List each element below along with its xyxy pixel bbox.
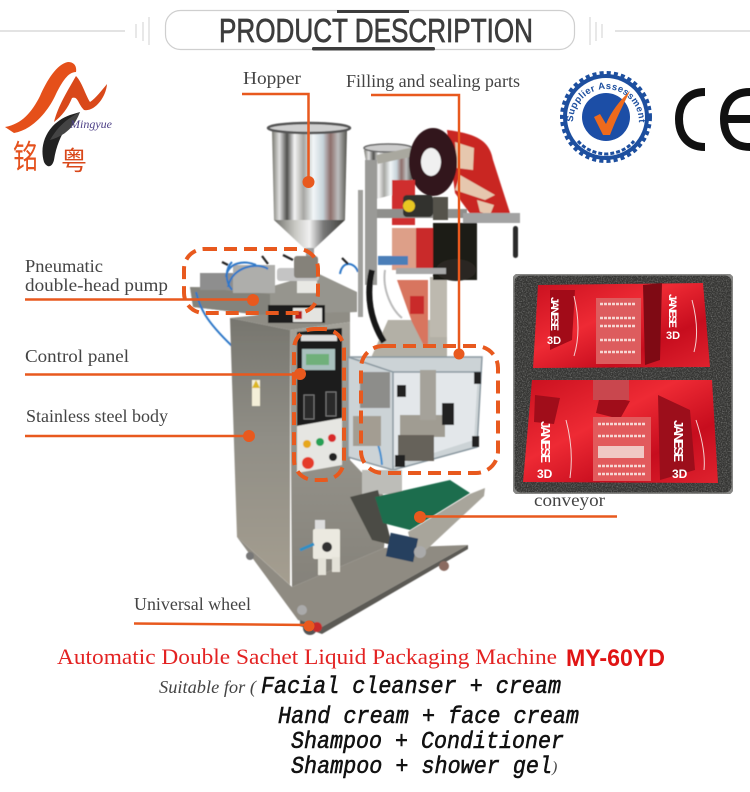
second hopper and frame: [358, 144, 447, 360]
label: universal wheel: [134, 594, 314, 632]
suitable for list: Shampoo + Conditioner: [291, 729, 564, 756]
label: stainless steel body: [25, 406, 255, 442]
pneumatic pump: [190, 255, 358, 346]
icon: CE mark: [679, 92, 750, 147]
badge: supplier assessment: [560, 71, 652, 163]
machine title: Automatic Double Sachet Liquid Packaging Machine: [57, 644, 557, 669]
suitable for list: ): [551, 759, 557, 776]
header: product description: PRODUCT DESCRIPTION: [219, 12, 533, 49]
hopper: [268, 123, 350, 258]
sachet: bottom: JANESE: [671, 420, 686, 462]
label: pneumatic double-head pump: [25, 256, 259, 306]
conveyor: [350, 470, 485, 562]
label: universal wheel: Universal wheel: [134, 594, 251, 614]
control panel: [297, 328, 342, 473]
label: filling and sealing parts: Filling and sealing parts: [346, 71, 520, 91]
air filter unit: [300, 520, 340, 575]
label: conveyor: conveyor: [534, 490, 605, 510]
film roll and bag former: [377, 128, 520, 346]
label: filling and sealing parts: [346, 71, 520, 360]
logo: Mingyue: 铭: [13, 139, 38, 176]
sachet: bottom: 3D: [672, 467, 688, 481]
stainless steel body: [230, 312, 388, 587]
sachet: top: JANESE: [666, 294, 678, 328]
sachet: bottom: [523, 380, 718, 483]
sachet: top: 3D: [547, 335, 561, 347]
label: control panel: [25, 346, 306, 380]
label: pneumatic double-head pump: double-head pump: [25, 275, 168, 295]
label: conveyor: [414, 490, 617, 523]
suitable for list: [159, 674, 579, 781]
suitable for list: Facial cleanser + cream: [261, 674, 561, 701]
sachet: top: [533, 283, 710, 368]
dashed highlight: control panel: [294, 329, 344, 480]
sachet photo: [513, 274, 733, 494]
sachet: bottom: 3D: [537, 467, 553, 481]
label: stainless steel body: Stainless steel body: [26, 406, 168, 426]
sachet: top: 3D: [666, 330, 680, 342]
machine title: [57, 644, 665, 672]
dashed highlight: pump: [184, 249, 318, 313]
dashed highlight: filling and sealing: [361, 346, 498, 473]
label: hopper: Hopper: [243, 68, 301, 88]
temperature control box: [268, 305, 325, 323]
badge: supplier assessment: Supplier Assessment: [567, 82, 645, 122]
label: hopper: [242, 68, 314, 188]
base plate: [237, 537, 468, 635]
logo: Mingyue: Mingyue: [69, 117, 113, 131]
machine title: MY-60YD: [566, 645, 665, 672]
label: control panel: Control panel: [25, 346, 129, 366]
label: pneumatic double-head pump: Pneumatic: [25, 256, 103, 276]
sachet: top: JANESE: [548, 297, 560, 331]
header: product description: [0, 10, 750, 50]
machine photo: [190, 123, 520, 635]
sachet: bottom: JANESE: [538, 421, 553, 463]
logo: Mingyue: 粤: [61, 146, 87, 176]
suitable for list: Hand cream + face cream: [278, 704, 579, 731]
suitable for list: Shampoo + shower gel: [291, 754, 552, 781]
logo: Mingyue: [5, 62, 113, 176]
suitable for list: Suitable for (: [159, 677, 257, 698]
clear safety box: [348, 357, 482, 470]
